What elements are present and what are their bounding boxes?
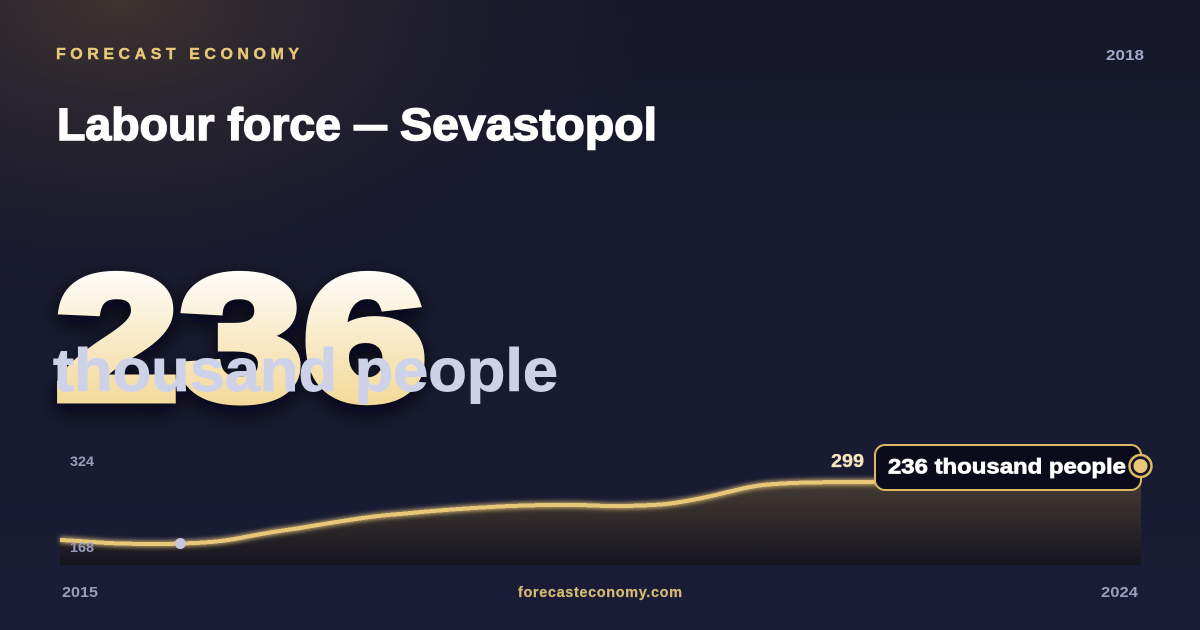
end year label: 2024 [1101,584,1139,601]
title: — [354,99,387,150]
axis max label: 324 [70,453,94,469]
low point marker [175,538,186,549]
title [57,99,657,150]
start year label: 2015 [62,584,98,601]
big number shadow: 236 [55,247,427,445]
title: Sevastopol [400,99,657,150]
title: Labour force [57,99,341,150]
axis min label: 168 [70,539,94,555]
peak value label: 299 [831,451,864,471]
line glow [60,482,880,544]
line chart [60,482,1141,565]
unit label: thousand people [53,337,558,404]
big number: 236 [55,239,427,437]
callout [875,445,1141,490]
callout: 236 thousand people [888,454,1126,478]
brand label: FORECAST ECONOMY [56,46,303,63]
source label: forecasteconomy.com [518,585,682,601]
year label: 2018 [1106,47,1144,64]
chart area fill [60,482,1141,565]
line [60,482,880,544]
end point marker [1130,455,1152,477]
